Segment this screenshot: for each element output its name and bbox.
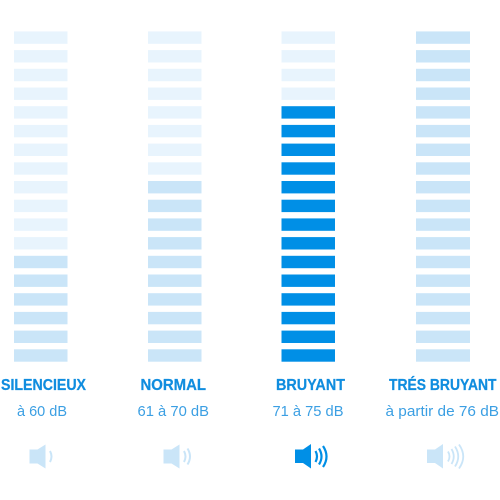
icon: speaker three waves [295,444,326,468]
panel: bruyant [272,31,345,469]
panel: tres bruyant [386,31,499,469]
panel: normal [138,31,209,469]
range: tres bruyant: à partir de 76 dB [386,403,499,420]
heading: bruyant: BRUYANT [276,377,345,394]
bar chart: silencieux level [14,31,68,362]
bar chart: normal level [148,31,202,362]
icon: speaker four waves [427,444,463,468]
panel: silencieux [1,31,87,469]
bar chart: tres bruyant level [416,31,470,362]
heading: normal: NORMAL [140,377,206,394]
icon: speaker one wave [30,444,52,468]
range: normal: 61 à 70 dB [138,403,209,420]
heading: silencieux: SILENCIEUX [1,377,87,394]
icon: speaker two waves [164,444,190,468]
range: silencieux: à 60 dB [17,403,67,420]
range: bruyant: 71 à 75 dB [272,403,344,420]
bar chart: bruyant level [282,31,335,362]
